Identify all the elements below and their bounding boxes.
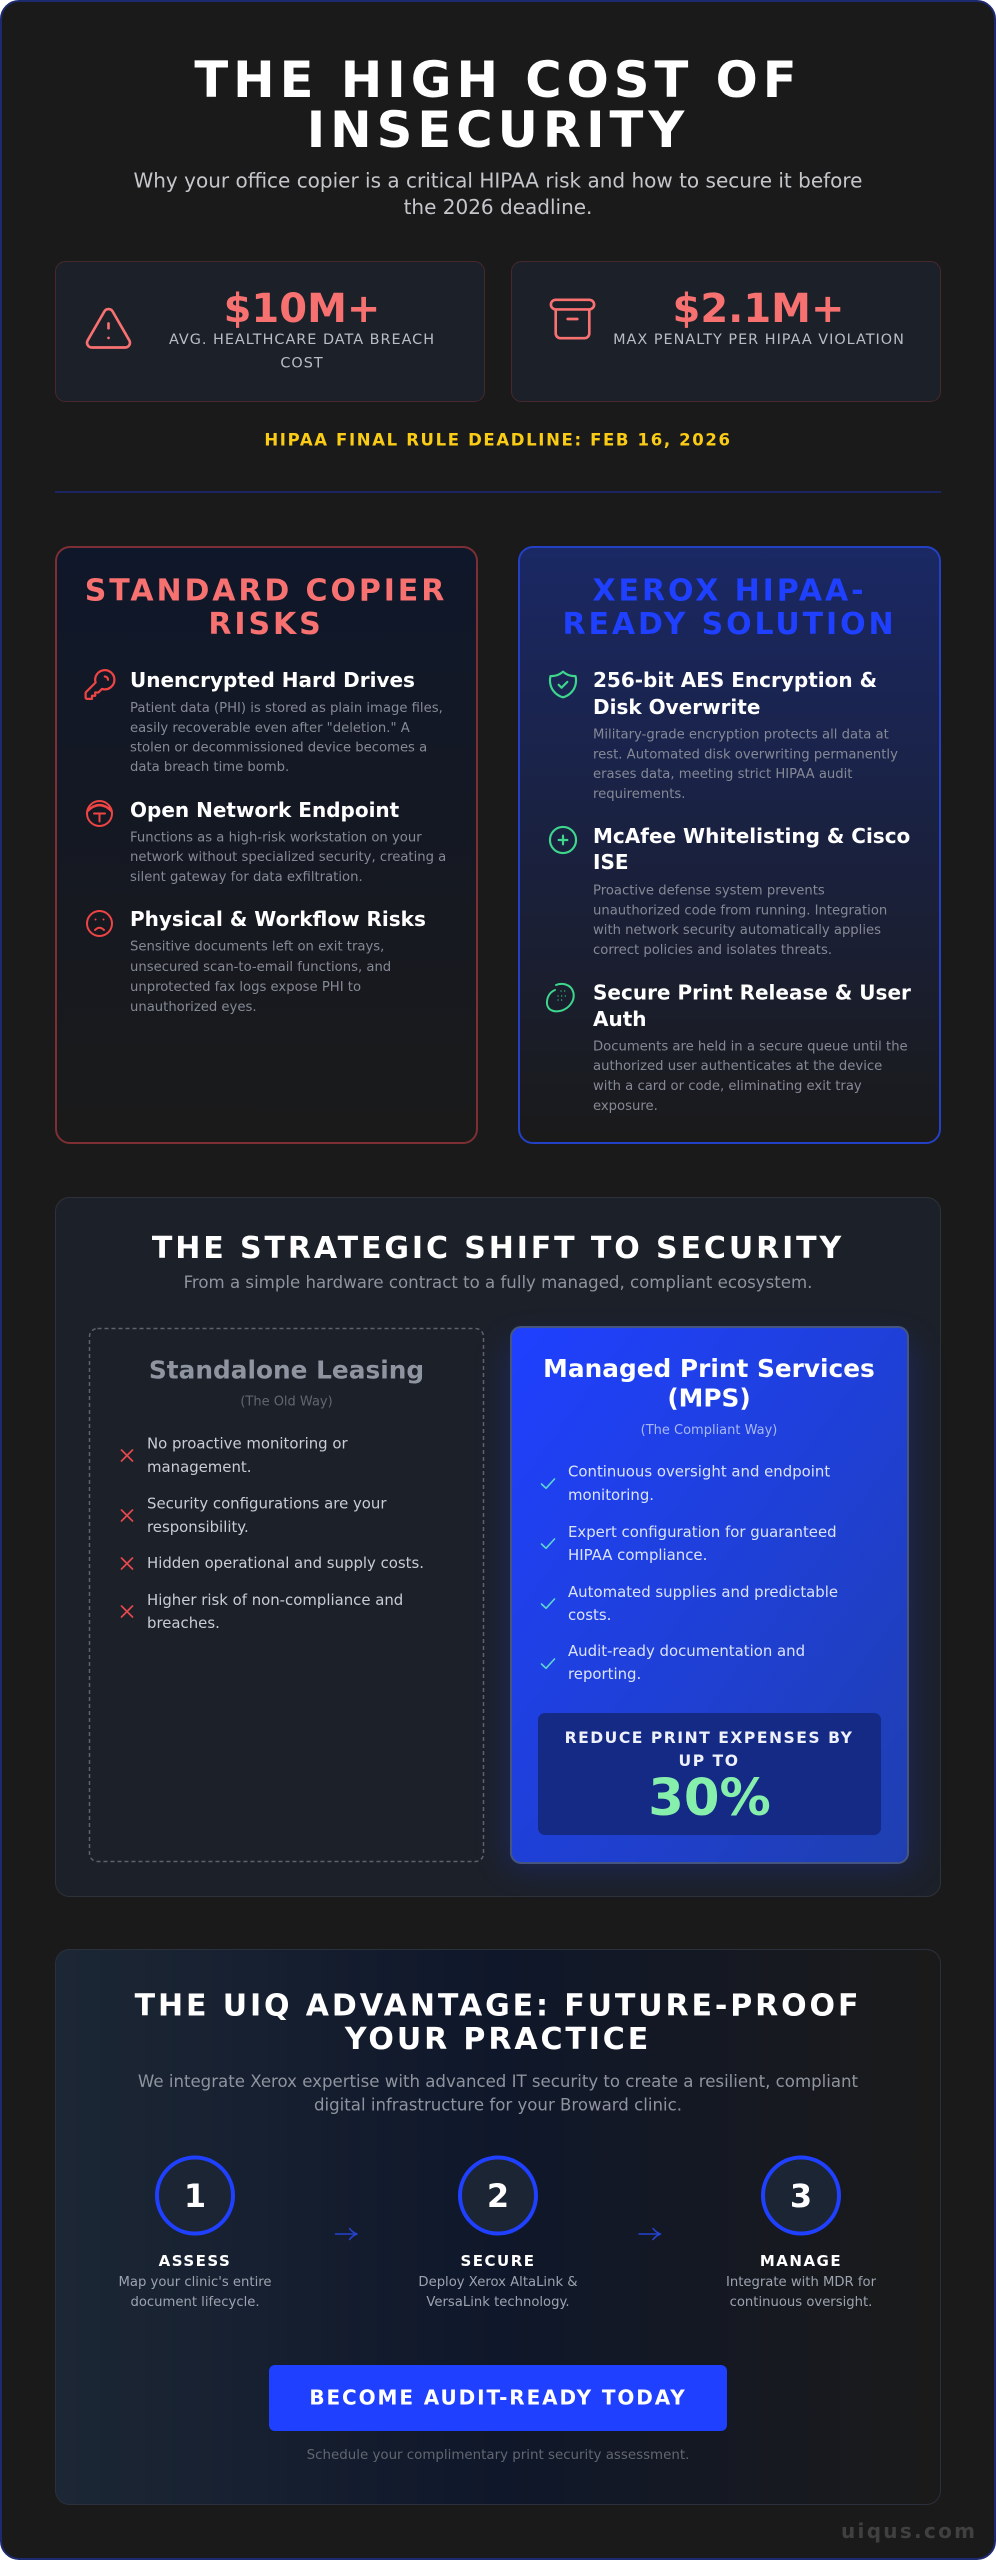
panel heading: RISKS [208,607,324,642]
section subheading: From a simple hardware contract to a fully managed, compliant ecosystem. [184,1273,812,1292]
step 3: manage [726,2158,877,2310]
card: standalone leasing: Standalone Leasing [149,1356,424,1384]
section subheading: We integrate Xerox expertise with advanced IT security to create a resilient, compliant [138,2072,859,2091]
section subheading: digital infrastructure for your Broward clinic. [314,2096,682,2114]
feature: encryption: requirements. [593,787,685,802]
footnote: Schedule your complimentary print security assessment. [307,2448,689,2463]
icon: warning triangle [87,309,130,348]
step 3: manage: continuous oversight. [730,2295,872,2310]
feature: secure print release: authorized user authenticates at the device [593,1059,882,1074]
list: drawbacks: management. [147,1458,251,1476]
panel heading: XEROX HIPAA- [593,574,866,608]
step 2: secure: SECURE [460,2252,536,2270]
risk: open network endpoint: silent gateway for data exfiltration. [130,870,363,885]
callout: savings: UP TO [679,1752,739,1770]
risk: unencrypted hard drives: Unencrypted Hard Drives [130,668,415,692]
step 1: assess [119,2158,271,2310]
step 1: assess: ASSESS [159,2252,231,2270]
feature: whitelisting: correct policies and isolates threats. [593,943,832,958]
subtitle: the 2026 deadline. [404,195,592,219]
header [133,51,863,219]
step 1: assess: 1 [184,2177,206,2215]
feature: secure print release: Documents are held in a secure queue until the [593,1040,908,1054]
card: managed print services: (MPS) [667,1384,751,1412]
section heading: THE UIQ ADVANTAGE: FUTURE-PROOF [135,1988,861,2024]
list: benefits: Continuous oversight and endpoint [568,1462,830,1480]
risk: unencrypted hard drives: easily recoverable even after "deletion." A [130,721,410,736]
risk: open network endpoint: Functions as a high-risk workstation on your [130,830,422,846]
list: benefits: HIPAA compliance. [568,1546,707,1564]
feature: encryption: Disk Overwrite [593,695,760,719]
call to action button: BECOME AUDIT-READY TODAY [309,2386,687,2410]
list: benefits: monitoring. [568,1486,654,1504]
step 3: manage: Integrate with MDR for [726,2275,877,2290]
list: benefits: costs. [568,1606,611,1624]
panel heading: READY SOLUTION [562,607,897,642]
icon: fingerprint blob [547,984,574,1011]
card: standalone leasing [90,1328,484,1862]
risk: physical and workflow [87,907,426,1015]
deadline notice: HIPAA FINAL RULE DEADLINE: FEB 16, 2026 [264,430,732,450]
feature: whitelisting: ISE [593,850,629,874]
feature: secure print release: Auth [593,1007,647,1031]
call to action button [269,2365,727,2431]
section heading: THE STRATEGIC SHIFT TO SECURITY [152,1231,844,1266]
list: drawbacks: breaches. [147,1614,220,1632]
feature: whitelisting: Proactive defense system prevents [593,884,825,898]
arrow [639,2228,660,2240]
stat label [169,332,435,372]
step 2: secure: VersaLink technology. [426,2295,570,2310]
stat value: $10M+ [224,286,380,332]
section heading: YOUR PRACTICE [344,2022,651,2057]
risk: physical and workflow: unprotected fax logs expose PHI to [130,980,361,995]
risk: physical and workflow: unsecured scan-to-email functions, and [130,960,391,975]
feature: whitelisting [550,824,910,958]
section heading [135,1988,861,2057]
panel heading [85,574,447,642]
list: benefits: reporting. [568,1665,641,1683]
feature: encryption: rest. Automated disk overwriting permanently [593,748,898,762]
list: drawbacks: No proactive monitoring or [147,1434,348,1452]
panel heading: STANDARD COPIER [85,574,447,608]
card: managed print services: Managed Print Services [543,1354,875,1383]
risk: unencrypted hard drives [86,668,443,775]
risk: unencrypted hard drives: stolen or decommissioned device becomes a [130,740,427,756]
risk: unencrypted hard drives: data breach time bomb. [130,760,289,775]
subtitle [133,168,863,219]
risk: physical and workflow: Physical & Workflow Risks [130,907,426,931]
card: managed print services [505,1327,915,1870]
feature: whitelisting: with network security automatically applies [593,923,881,938]
card: managed print services: (The Compliant Way) [641,1423,777,1438]
step 1: assess: Map your clinic's entire [119,2275,271,2290]
icon: network endpoint [87,801,112,826]
risk: unencrypted hard drives: Patient data (PHI) is stored as plain image files, [130,701,443,716]
stat label: MAX PENALTY PER HIPAA VIOLATION [613,332,905,348]
feature: secure print release: exposure. [593,1099,658,1114]
icon: shield check [550,672,576,697]
step 2: secure: Deploy Xerox AltaLink & [418,2275,578,2290]
step 2: secure: 2 [487,2177,509,2215]
feature: secure print release: with a card or code, eliminating exit tray [593,1079,862,1094]
list: drawbacks: responsibility. [147,1518,249,1536]
title: INSECURITY [307,101,689,159]
icon: sad face [87,911,112,936]
feature: whitelisting: McAfee Whitelisting & Cisco [593,824,910,848]
callout: savings [538,1713,881,1835]
icon: key [86,670,114,699]
stat value: $2.1M+ [672,286,845,332]
risk: physical and workflow: Sensitive documents left on exit trays, [130,940,384,954]
feature: encryption: Military-grade encryption protects all data at [593,728,889,742]
feature: secure print release [547,980,911,1114]
panel heading [562,574,897,642]
feature: whitelisting: unauthorized code from running. Integration [593,904,887,918]
step 2: secure [418,2158,578,2310]
step 1: assess: document lifecycle. [130,2295,260,2310]
list: drawbacks [122,1434,424,1632]
risk: open network endpoint [87,798,446,885]
watermark: uiqus.com [841,2519,977,2543]
list: benefits: Audit-ready documentation and [568,1642,805,1660]
risk: open network endpoint: Open Network Endpoint [130,798,400,822]
section subheading [138,2072,859,2114]
callout: savings: 30% [648,1768,771,1828]
feature: encryption: erases data, meeting strict HIPAA audit [593,767,852,782]
panel: xerox hipaa-ready solution [519,547,940,1143]
stat card: HIPAA penalty [512,262,940,402]
callout: savings: REDUCE PRINT EXPENSES BY [565,1729,853,1747]
step 3: manage: 3 [790,2177,812,2215]
title [194,51,802,159]
stat label: AVG. HEALTHCARE DATA BREACH [169,332,435,348]
title: THE HIGH COST OF [194,51,802,109]
panel: strategic shift [56,1198,940,1896]
risk: physical and workflow: unauthorized eyes. [130,1000,257,1015]
panel: the uiq advantage [56,1950,940,2504]
icon: archive box [551,300,594,338]
list: benefits: Automated supplies and predictable [568,1583,838,1601]
stat label: COST [280,356,324,372]
icon: plus circle [550,827,576,853]
stat card: data breach cost [56,262,484,402]
list: benefits [542,1462,838,1683]
list: drawbacks: Hidden operational and supply costs. [147,1554,424,1572]
feature: encryption [550,668,898,802]
step 3: manage: MANAGE [760,2252,842,2270]
list: benefits: Expert configuration for guaranteed [568,1523,837,1541]
risk: open network endpoint: network without specialized security, creating a [130,850,446,865]
card: standalone leasing: (The Old Way) [240,1394,333,1410]
list: drawbacks: Higher risk of non-compliance and [147,1591,403,1609]
list: drawbacks: Security configurations are your [147,1494,387,1512]
panel: standard copier risks [56,547,477,1143]
feature: encryption: 256-bit AES Encryption & [593,668,877,692]
subtitle: Why your office copier is a critical HIPAA risk and how to secure it before [133,168,863,192]
feature: secure print release: Secure Print Release & User [593,980,911,1004]
arrow [336,2228,357,2240]
